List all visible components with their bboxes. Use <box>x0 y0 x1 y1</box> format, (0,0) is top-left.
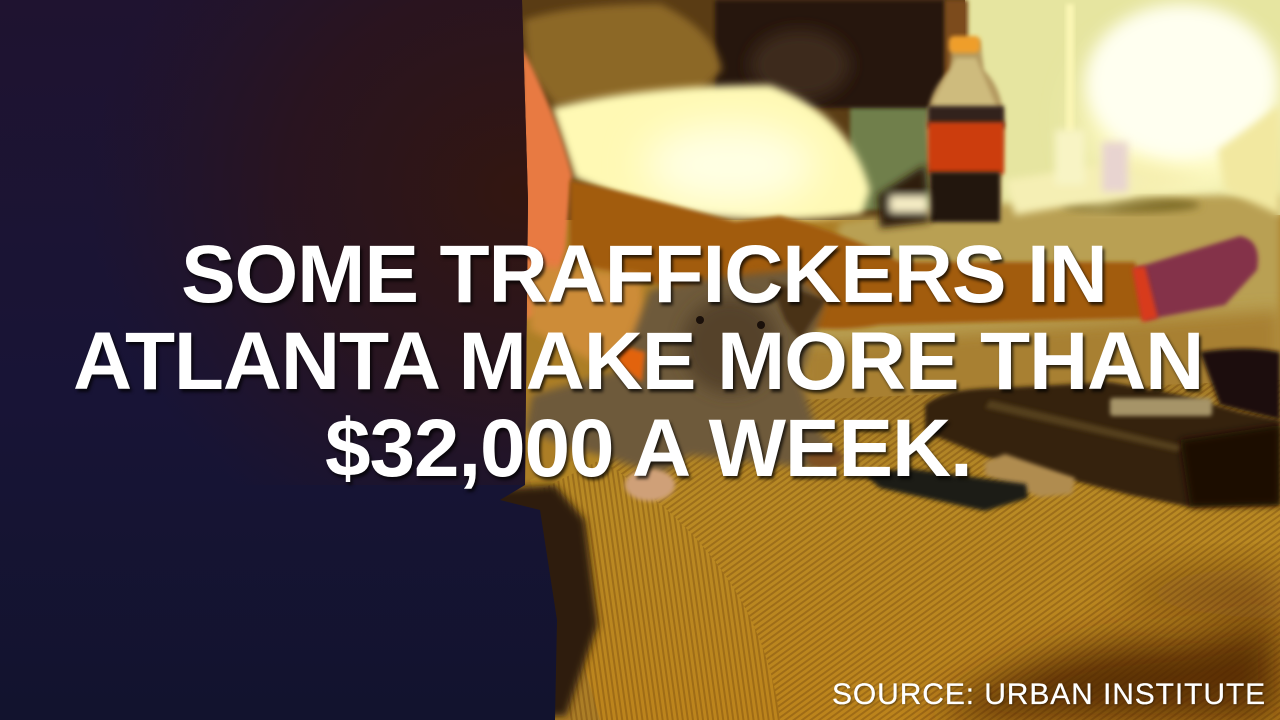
headboard and hair <box>524 0 968 125</box>
headline: ATLANTA MAKE MORE THAN <box>73 316 1203 407</box>
white pillow <box>552 85 870 219</box>
bed sheets, right pillow and bedspread <box>530 105 1280 720</box>
dog <box>525 270 843 501</box>
lamp glow and pole <box>1066 4 1278 200</box>
items on the bed: bag, phones <box>866 348 1280 511</box>
headline: $32,000 A WEEK. <box>325 403 972 494</box>
soda bottle <box>926 36 1004 222</box>
person: shirt, arm, leg and sock <box>522 48 1258 365</box>
objects beside bottle <box>878 130 1150 228</box>
source credit: SOURCE: URBAN INSTITUTE <box>832 678 1266 711</box>
headline: SOME TRAFFICKERS IN <box>181 229 1107 320</box>
foreground dark figure <box>0 0 598 720</box>
headline <box>73 229 1204 494</box>
